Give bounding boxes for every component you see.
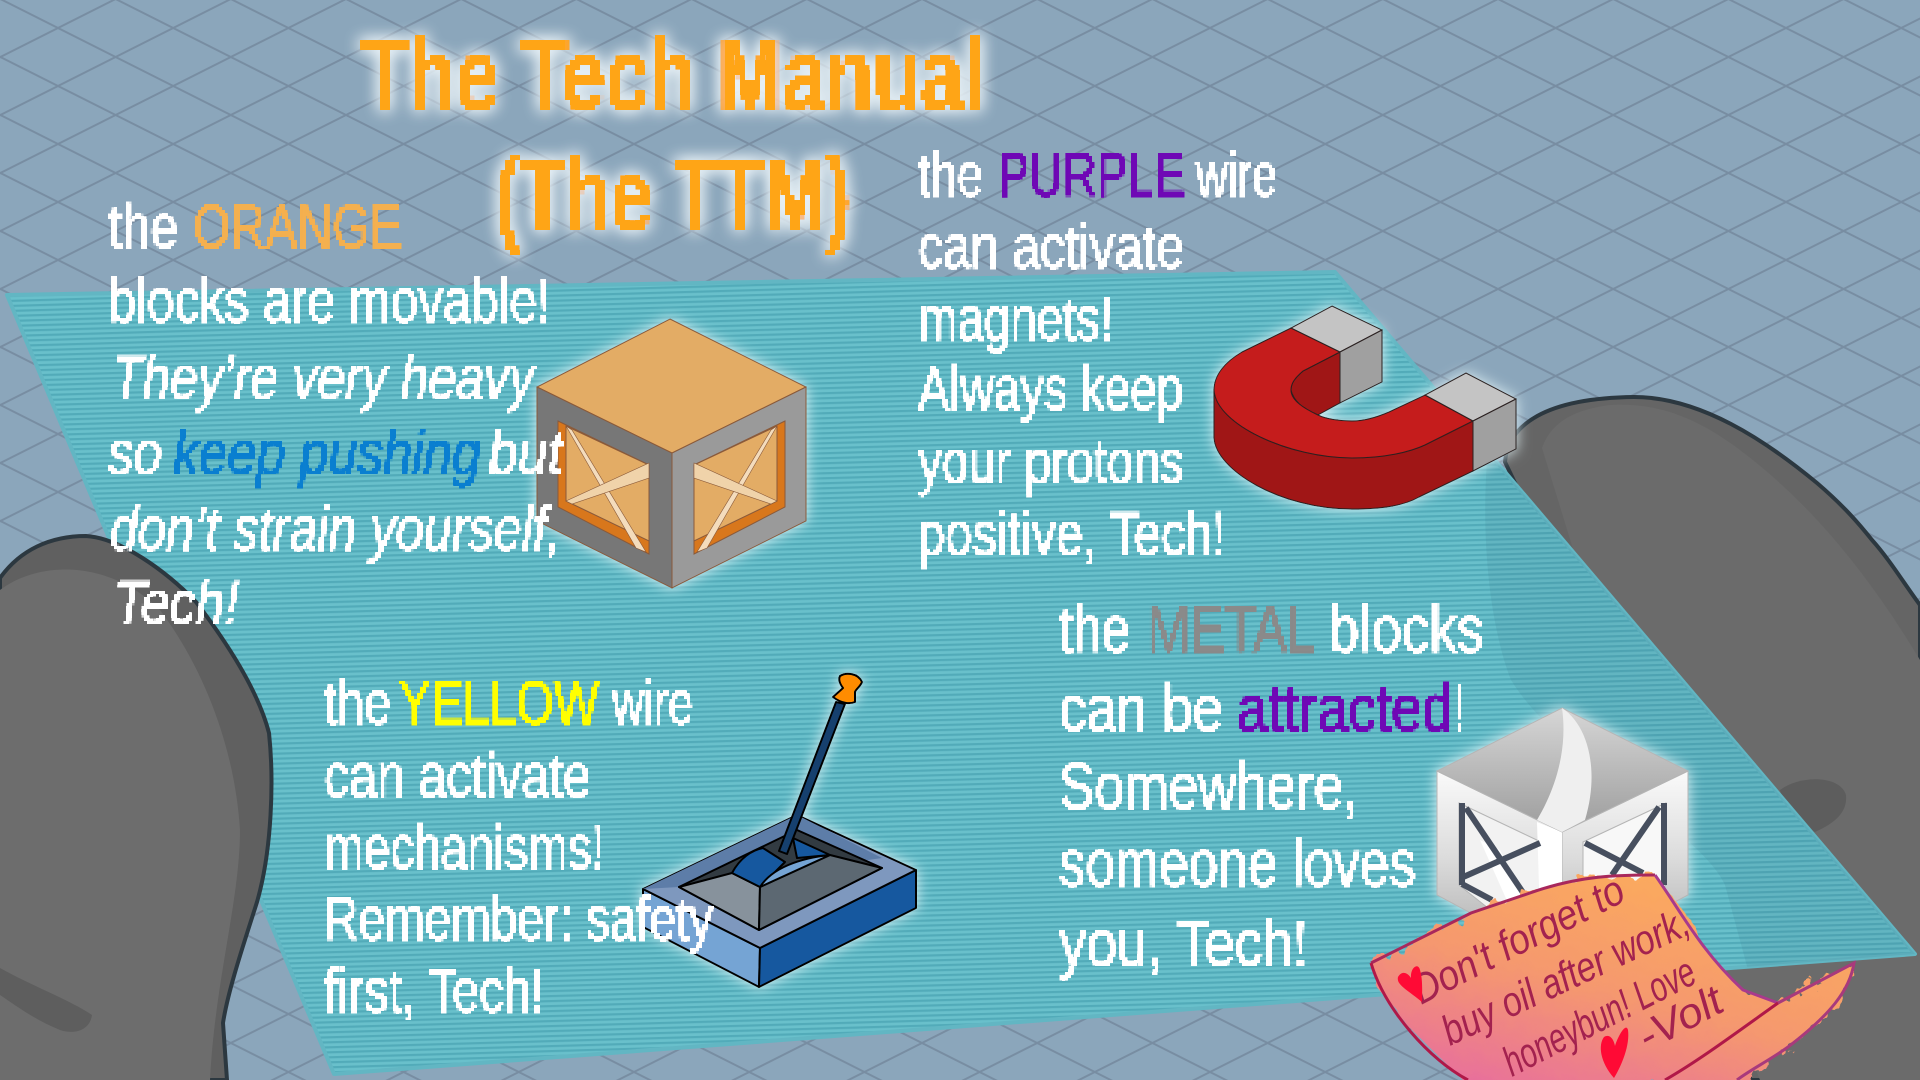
text: purple wire: your protons: [918, 428, 1184, 497]
text: orange blocks: Tech!: [114, 569, 239, 638]
paper: teal manual sheet: [7, 272, 1915, 1074]
icon: heart large: [1601, 1028, 1628, 1078]
note text: honeybun! Love: [1495, 948, 1703, 1080]
icon: red horseshoe magnet: [1214, 306, 1516, 509]
text: orange blocks: They’re very heavy: [112, 344, 537, 413]
text: yellow wire: YELLOW: [399, 669, 599, 738]
text: yellow wire: [324, 669, 713, 1026]
text: purple wire: can activate: [918, 213, 1184, 282]
text: orange blocks: the: [108, 193, 178, 262]
text: purple wire: wire: [1195, 141, 1277, 210]
text: yellow wire: the: [324, 669, 391, 738]
left thumb over the paper: [0, 536, 271, 1080]
text: metal blocks: blocks: [1329, 592, 1484, 666]
note text: buy oil after work,: [1434, 898, 1697, 1054]
text: metal blocks: can be: [1059, 671, 1223, 745]
text: metal blocks: you, Tech!: [1059, 906, 1308, 980]
text: orange blocks: ORANGE: [193, 193, 402, 262]
text: metal blocks: !: [1454, 671, 1464, 745]
text: purple wire: Always keep: [918, 355, 1183, 424]
text: orange blocks: don’t strain yourself,: [110, 495, 561, 564]
text: metal blocks: Somewhere,: [1059, 749, 1358, 823]
title: (The TTM): [495, 137, 851, 254]
text: metal blocks: METAL: [1147, 592, 1316, 666]
text: yellow wire: Remember: safety: [324, 885, 713, 954]
title: [361, 17, 985, 254]
text: metal blocks: [1059, 592, 1484, 980]
sticky note from Volt: [1371, 866, 1854, 1080]
text: metal blocks: the: [1059, 592, 1130, 666]
text: purple wire: positive, Tech!: [918, 500, 1226, 569]
text: metal blocks: attracted: [1237, 671, 1453, 745]
text: yellow wire: first, Tech!: [324, 957, 544, 1026]
icon: orange crate: [537, 319, 806, 588]
paper: ghost of thumb through the sheet: [1485, 440, 1920, 970]
text: orange blocks: so: [108, 419, 162, 488]
text: orange blocks: but: [488, 419, 565, 488]
text: yellow wire: can activate: [324, 742, 591, 811]
title: The Tech Manual: [361, 17, 985, 134]
icon: lever mechanism: [643, 674, 916, 987]
icon: metal block: [1437, 708, 1688, 962]
note text: -Volt: [1629, 975, 1733, 1060]
text: yellow wire: mechanisms!: [324, 814, 605, 883]
text: purple wire: PURPLE: [998, 141, 1185, 210]
text: yellow wire: wire: [611, 669, 693, 738]
icon: heart small: [1398, 966, 1422, 1002]
text: purple wire: the: [918, 141, 983, 210]
right thumb behind the paper: [1505, 397, 1920, 1080]
text: metal blocks: someone loves: [1059, 826, 1416, 900]
text: orange blocks: blocks are movable!: [108, 267, 551, 336]
text: purple wire: [918, 141, 1277, 569]
note text: Don't forget to: [1404, 866, 1632, 1013]
text: orange blocks: keep pushing: [173, 419, 481, 488]
text: purple wire: magnets!: [918, 285, 1113, 354]
text: orange blocks: [108, 193, 565, 638]
